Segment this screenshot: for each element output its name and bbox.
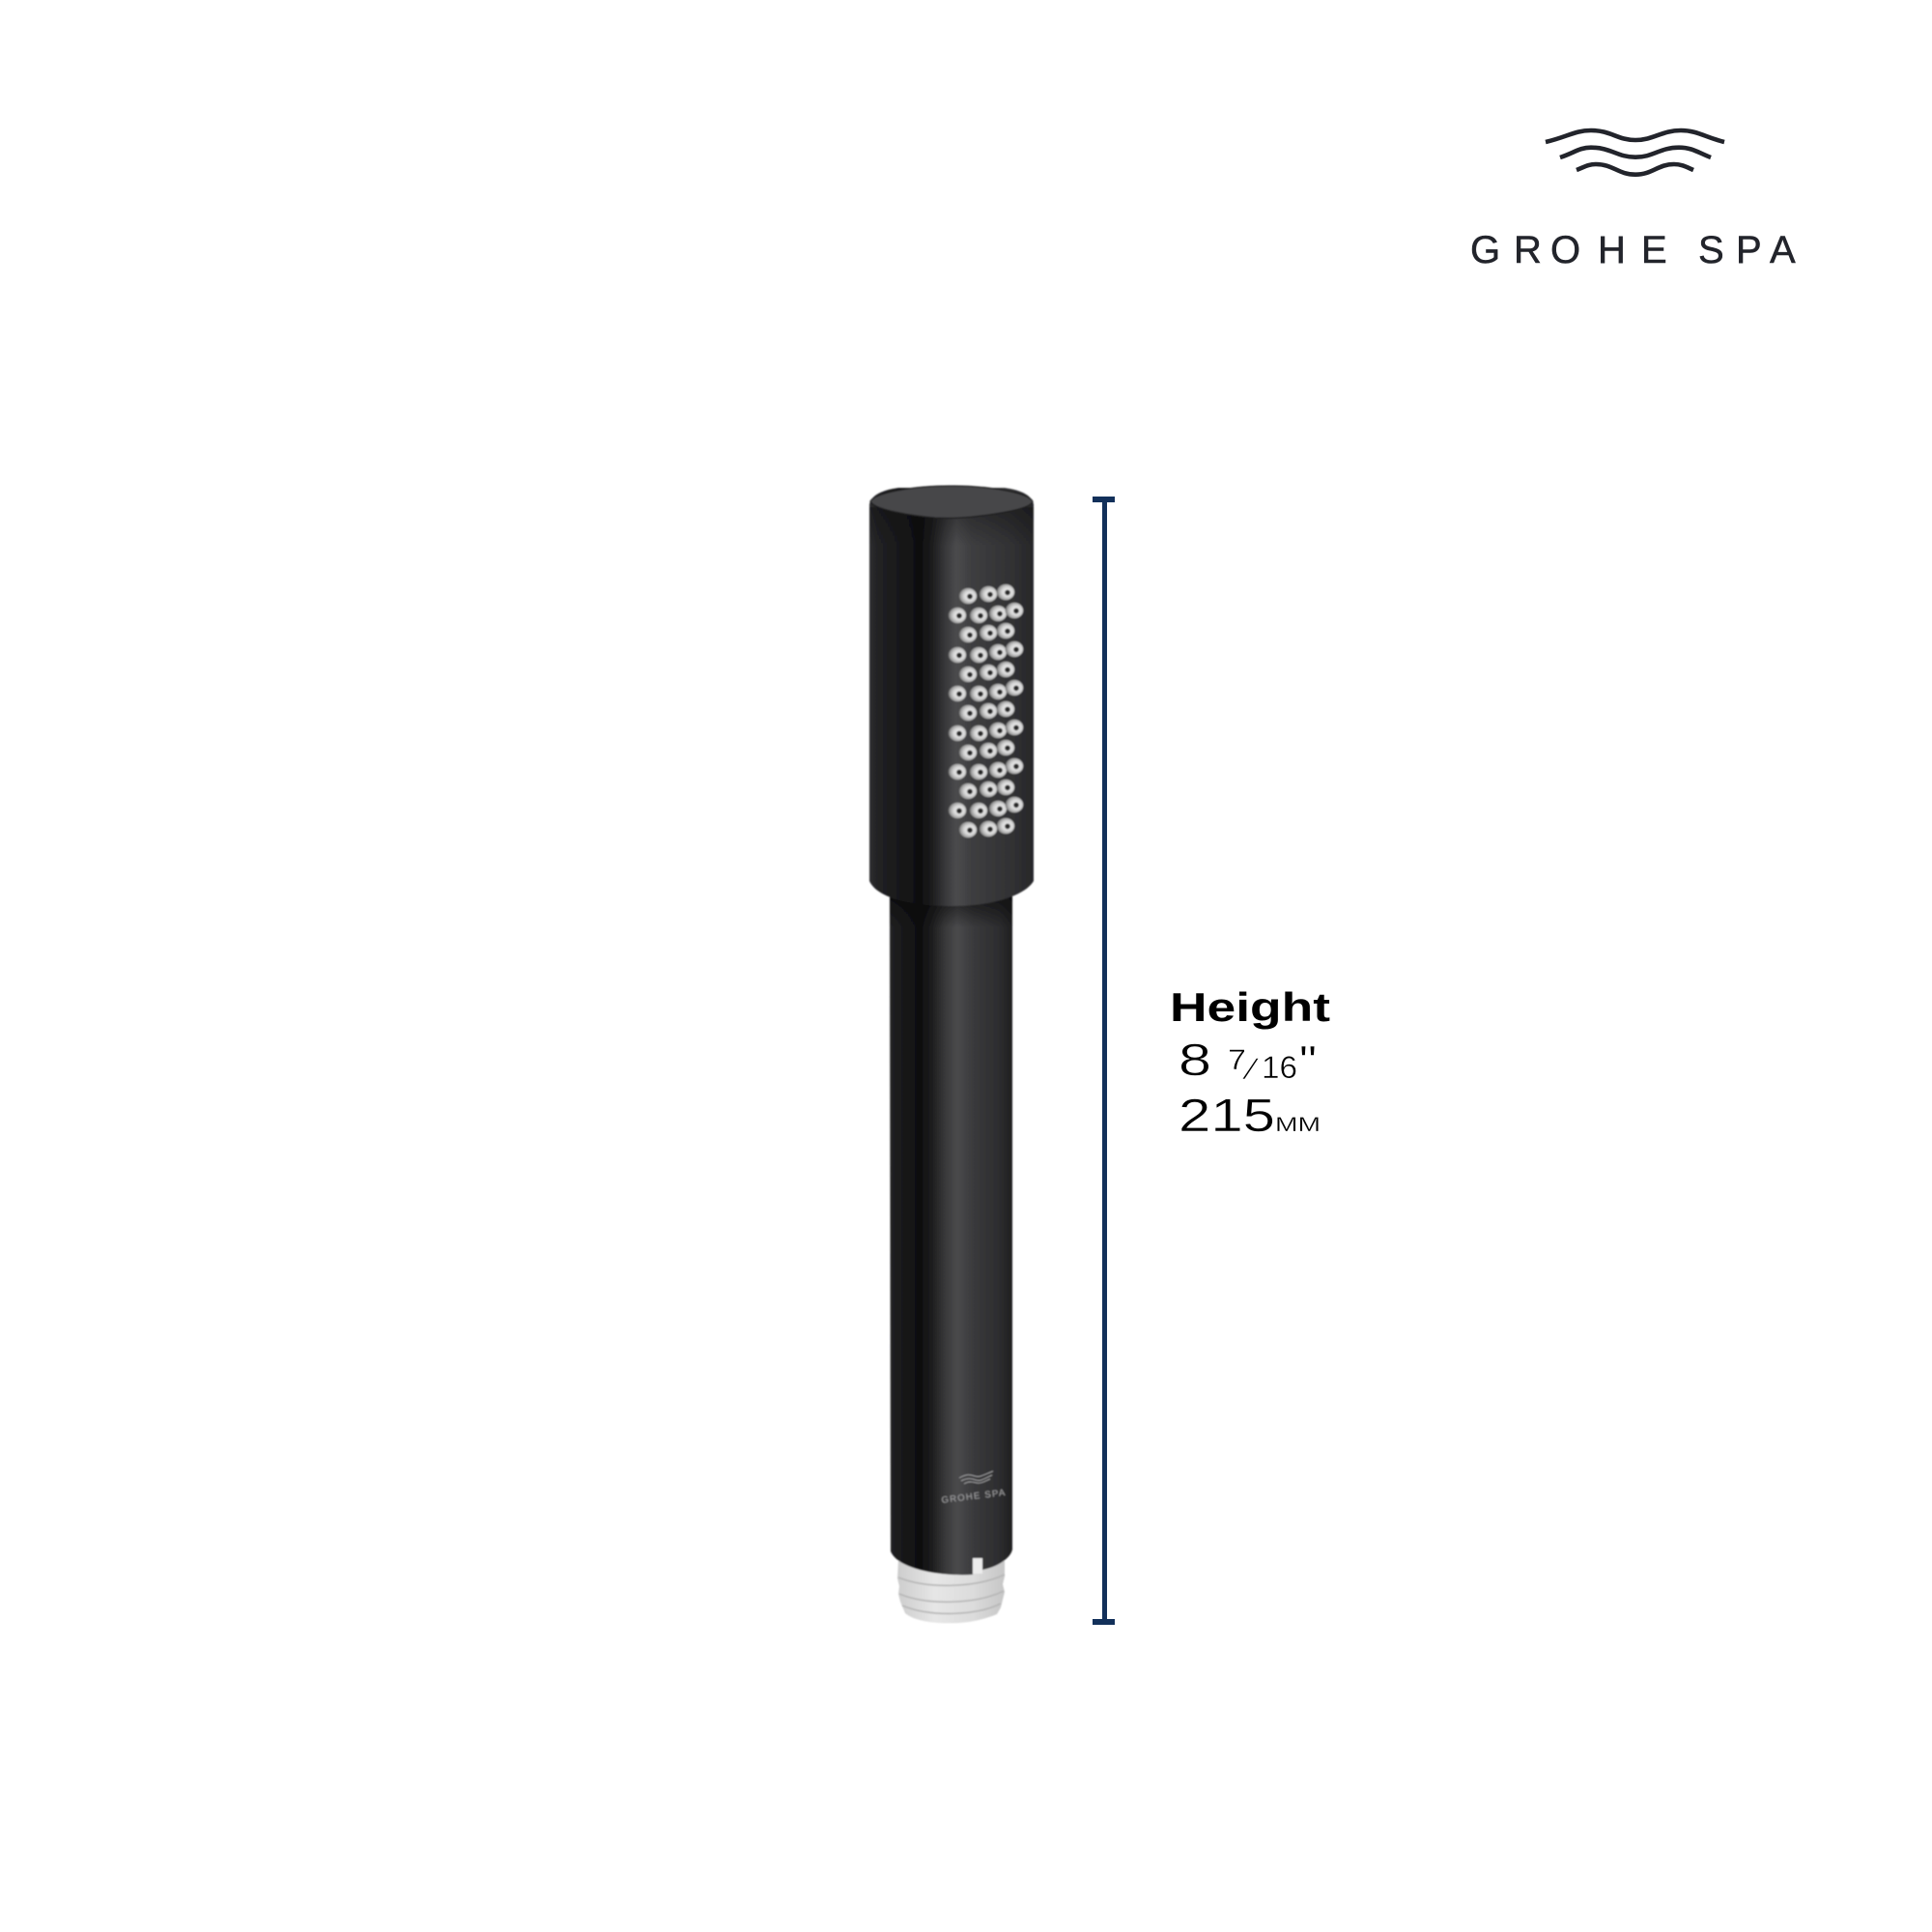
nozzles xyxy=(949,584,1023,838)
imperial value: 8 xyxy=(1179,1035,1211,1085)
imperial value: " xyxy=(1299,1037,1317,1085)
imperial value: 7 xyxy=(1228,1044,1246,1076)
shaft: GROHE SPA xyxy=(941,1488,1007,1506)
engraved small logo xyxy=(959,1471,993,1484)
slot notch xyxy=(973,1558,982,1574)
metric value xyxy=(1179,1091,1321,1142)
threaded connector xyxy=(897,1560,1005,1623)
dimension label: height xyxy=(1170,984,1330,1142)
imperial value: / xyxy=(1240,1052,1262,1086)
imperial value: 16 xyxy=(1262,1050,1297,1085)
head top face xyxy=(870,486,1033,518)
heading: Height xyxy=(1170,984,1330,1030)
icon: logo waves xyxy=(1546,130,1724,175)
metric value: 215 xyxy=(1179,1091,1275,1142)
logo wordmark: GROHE SPA xyxy=(1470,229,1796,271)
dimension line xyxy=(1093,497,1115,1625)
product: hand shower xyxy=(869,486,1034,1623)
metric value: MM xyxy=(1275,1114,1321,1136)
shaft xyxy=(890,869,1012,1575)
imperial value xyxy=(1179,1035,1317,1086)
logo: GROHE SPA xyxy=(1470,130,1796,271)
shower head body xyxy=(869,486,1034,906)
